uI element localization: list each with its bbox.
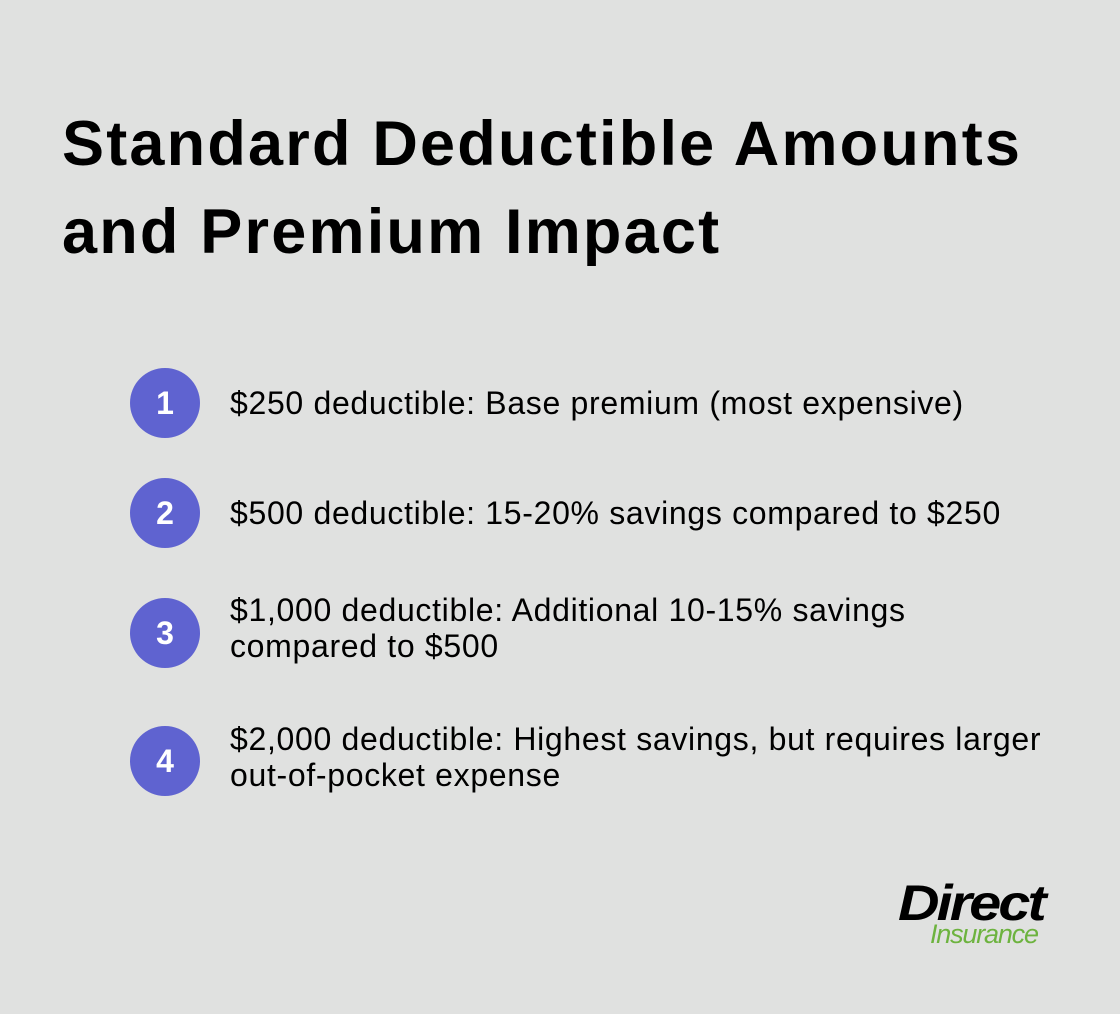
text 4: out-of-pocket expense: [230, 757, 561, 793]
circle 2: [130, 478, 200, 548]
circle 3: [130, 598, 200, 668]
title: and Premium Impact: [62, 197, 721, 267]
title: [62, 109, 1022, 267]
circle 4: [130, 726, 200, 796]
text 3: compared to $500: [230, 628, 499, 664]
circle 4: 4: [156, 743, 174, 779]
logo: Direct: [898, 875, 1044, 931]
text 3: $1,000 deductible: Additional 10-15% savings: [230, 592, 906, 628]
circle 1: [130, 368, 200, 438]
text 4: $2,000 deductible: Highest savings, but requires larger: [230, 721, 1041, 757]
text 2: $500 deductible: 15-20% savings compared to $250: [230, 495, 1001, 531]
circle 2: 2: [156, 495, 174, 531]
text 4: [230, 721, 1041, 793]
text 3: [230, 592, 906, 664]
circle 3: 3: [156, 615, 174, 651]
circle 1: 1: [156, 385, 174, 421]
title: Standard Deductible Amounts: [62, 109, 1022, 179]
logo: Insurance: [930, 919, 1038, 949]
text 1: $250 deductible: Base premium (most expensive): [230, 385, 964, 421]
